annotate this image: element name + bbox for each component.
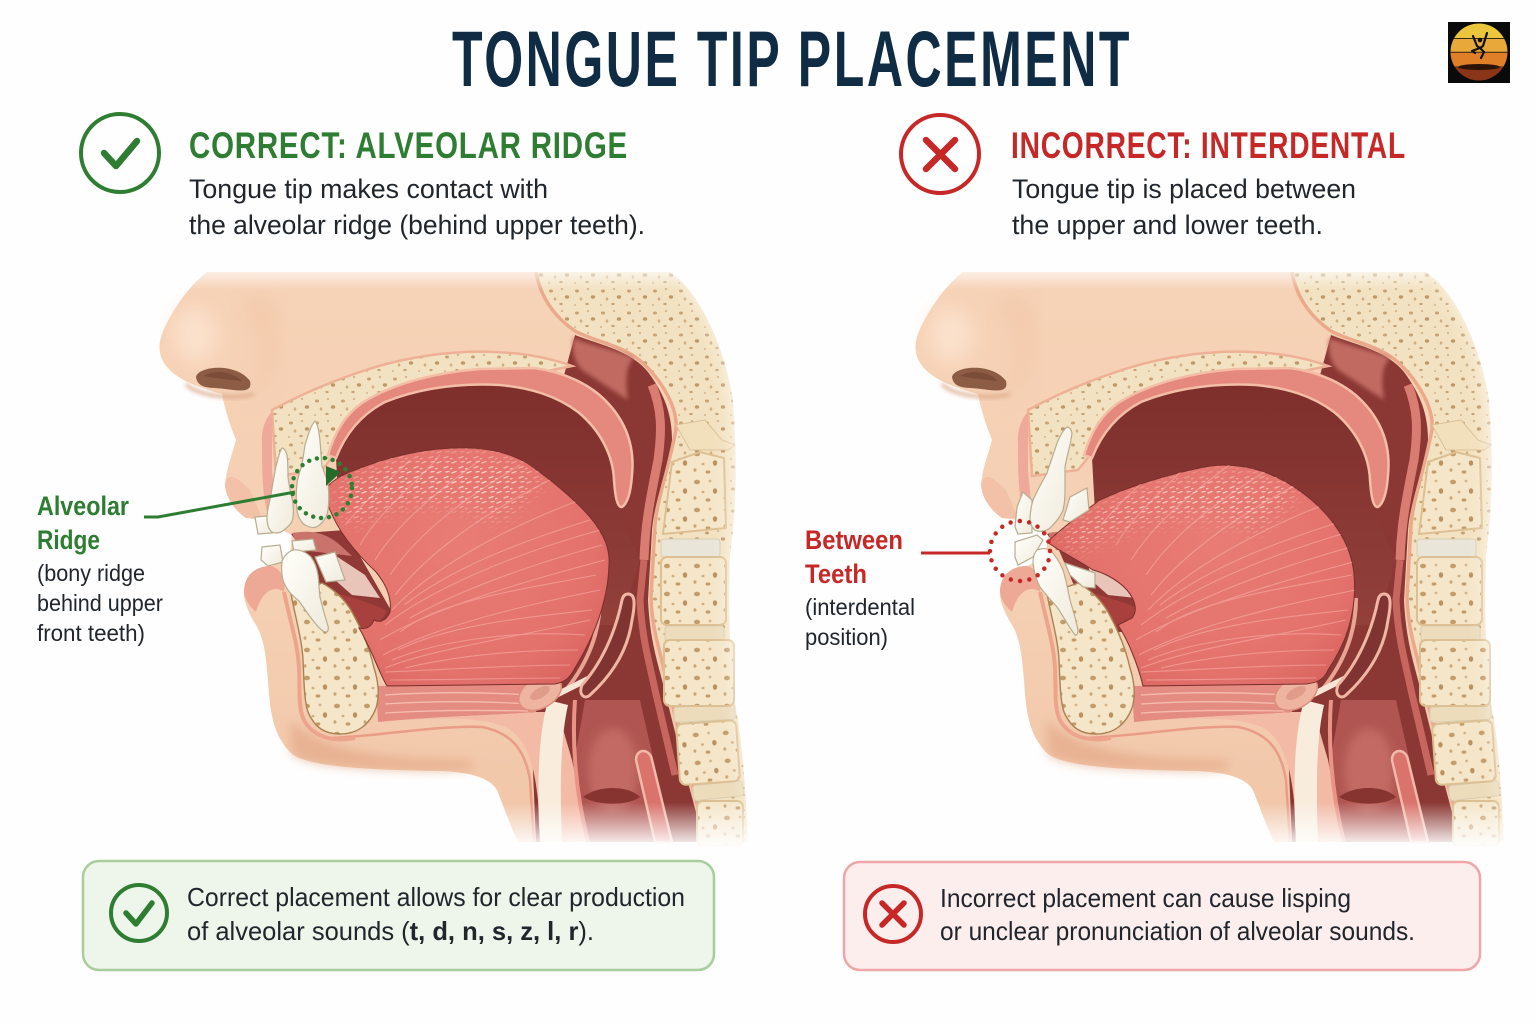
icon: green check xyxy=(81,114,159,192)
tongue: raised to alveolar ridge xyxy=(328,448,610,686)
text block: correct description xyxy=(189,174,645,240)
summary text: correct xyxy=(187,882,685,946)
label: between teeth: Between xyxy=(805,525,903,555)
text block: incorrect description: the upper and lower teeth. xyxy=(1012,210,1323,240)
heading: incorrect: INCORRECT: INTERDENTAL xyxy=(1011,125,1406,166)
label: alveolar ridge: Ridge xyxy=(37,525,100,555)
text block: correct description: the alveolar ridge (behind upper teeth). xyxy=(189,210,645,240)
text block: incorrect description xyxy=(1012,174,1356,240)
panel: incorrect summary xyxy=(844,862,1480,970)
arrow: between teeth leader xyxy=(921,552,990,554)
label: between teeth: (interdental xyxy=(805,594,915,620)
summary text: incorrect: Incorrect placement can cause lisping xyxy=(940,883,1351,913)
text block: incorrect description: Tongue tip is placed between xyxy=(1012,174,1356,204)
teeth: upper and lower xyxy=(255,421,345,632)
label: between teeth: Teeth xyxy=(805,559,867,589)
label: alveolar ridge xyxy=(37,491,163,646)
callout ring: alveolar ridge xyxy=(292,458,352,518)
label: alveolar ridge: behind upper xyxy=(37,590,163,616)
panel: correct summary xyxy=(83,861,714,970)
icon: red cross xyxy=(901,115,979,193)
tongue: protruding between teeth xyxy=(1046,464,1355,686)
label: alveolar ridge: (bony ridge xyxy=(37,560,145,586)
summary text: correct: Correct placement allows for clear production xyxy=(187,882,685,912)
label: between teeth: position) xyxy=(805,624,888,650)
text block: correct description: Tongue tip makes contact with xyxy=(189,174,548,204)
summary text: incorrect: or unclear pronunciation of alveolar sounds. xyxy=(940,916,1415,946)
icon: small cross xyxy=(865,886,921,942)
contact point at ridge xyxy=(326,466,341,486)
summary text: incorrect xyxy=(940,883,1415,946)
heading: correct: CORRECT: ALVEOLAR RIDGE xyxy=(189,125,628,166)
anatomy illustration: incorrect placement xyxy=(906,262,1528,850)
arrow: alveolar ridge leader xyxy=(144,492,295,517)
title: TONGUE TIP PLACEMENT xyxy=(452,14,1132,103)
label: alveolar ridge: Alveolar xyxy=(37,491,129,521)
label: alveolar ridge: front teeth) xyxy=(37,620,145,646)
anatomy illustration: correct placement xyxy=(150,262,772,850)
callout ring: between teeth xyxy=(990,521,1050,581)
logo: jumper on trampoline xyxy=(1448,22,1510,83)
label: between teeth xyxy=(805,525,915,650)
teeth: biting around tongue xyxy=(1015,427,1095,635)
icon: small check xyxy=(111,885,167,941)
summary text: correct: of alveolar sounds (t, d, n, s, z, l, r). xyxy=(187,916,594,946)
